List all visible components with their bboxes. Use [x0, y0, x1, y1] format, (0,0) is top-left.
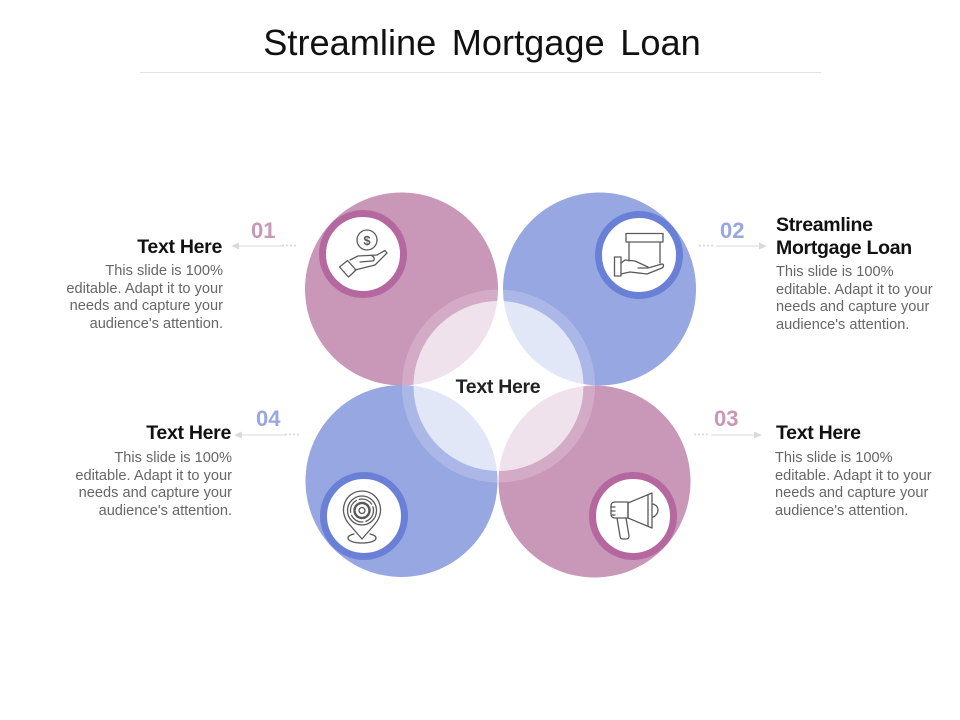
title: Streamline Mortgage Loan	[263, 22, 701, 63]
heading 01: Text Here	[137, 236, 222, 258]
body 02	[776, 264, 933, 333]
body 02: audience's attention.	[776, 317, 909, 333]
center inner circle	[414, 301, 584, 471]
petal: top left	[305, 192, 498, 386]
icon: map pin with gear	[343, 491, 381, 543]
body 03: This slide is 100%	[775, 450, 893, 466]
heading 02	[776, 214, 912, 259]
body 04	[75, 450, 232, 519]
body 03: audience's attention.	[775, 503, 908, 519]
body 04: needs and capture your	[79, 485, 232, 501]
block 01	[66, 236, 223, 332]
number 02: 02	[720, 218, 744, 243]
heading 03: Text Here	[776, 422, 861, 444]
heading 02: Mortgage Loan	[776, 237, 912, 259]
body 04: audience's attention.	[99, 503, 232, 519]
arrow 04	[234, 432, 301, 438]
center outer ring	[402, 290, 595, 482]
arrow 02	[699, 242, 767, 250]
body 01: editable. Adapt it to your	[66, 281, 223, 297]
block 03	[775, 422, 932, 519]
number 04: 04	[256, 406, 280, 431]
title rule	[140, 72, 821, 73]
body 04: editable. Adapt it to your	[75, 468, 232, 484]
arrow 01	[231, 242, 298, 250]
body 04: This slide is 100%	[114, 450, 232, 466]
heading 04: Text Here	[146, 422, 231, 444]
number 03: 03	[714, 406, 738, 431]
body 03: editable. Adapt it to your	[775, 468, 932, 484]
center label: Text Here	[456, 376, 540, 398]
block 04	[75, 422, 232, 519]
body 01: audience's attention.	[90, 316, 223, 332]
body 01: needs and capture your	[70, 298, 223, 314]
icon badge: megaphone	[592, 476, 674, 556]
petal: top right	[503, 192, 696, 386]
heading 02: Streamline	[776, 214, 873, 236]
icon: megaphone	[611, 493, 658, 539]
icon badge: box in hand	[598, 214, 680, 296]
body 03: needs and capture your	[775, 485, 928, 501]
body 02: editable. Adapt it to your	[776, 282, 933, 298]
petal: bottom left	[306, 385, 498, 577]
dollar sign: $	[363, 233, 371, 248]
icon: dollar in hand	[340, 230, 387, 277]
body 03	[775, 450, 932, 519]
icon: parcel on hand	[614, 234, 664, 276]
body 02: This slide is 100%	[776, 264, 894, 280]
arrow 03	[694, 432, 762, 438]
block 02	[776, 214, 933, 333]
body 02: needs and capture your	[776, 299, 929, 315]
body 01	[66, 263, 223, 332]
petal: bottom right	[498, 386, 690, 578]
number 01: 01	[251, 218, 275, 243]
icon badge: money hand	[322, 214, 404, 294]
icon badge: location gear	[324, 476, 404, 556]
body 01: This slide is 100%	[105, 263, 223, 279]
